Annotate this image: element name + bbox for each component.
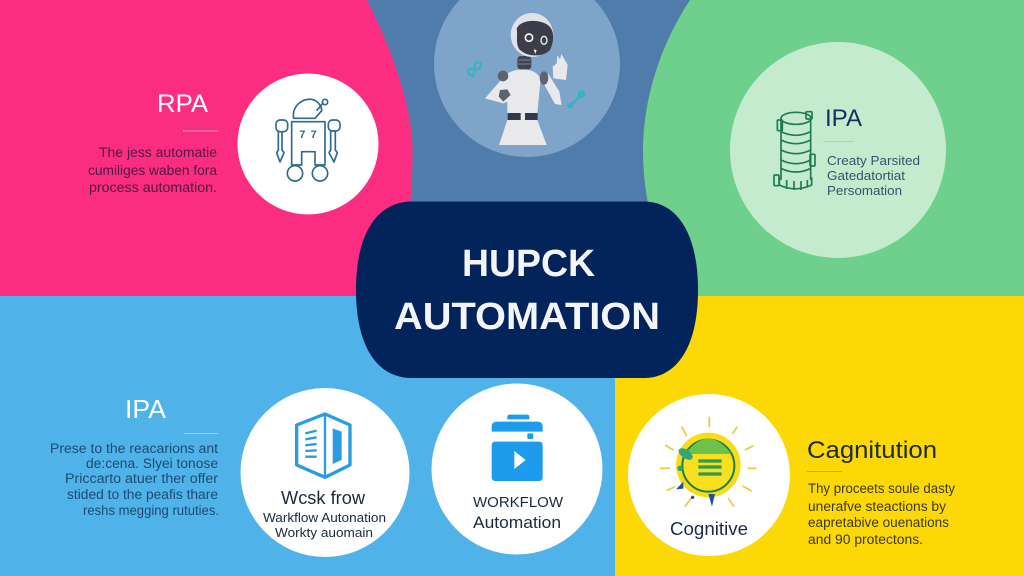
icon circle: Wesk flow: Wcsk frow <box>281 488 366 508</box>
icon circle: Workflow automation <box>432 384 602 554</box>
icon: teal wrench <box>568 91 584 107</box>
text: IPA blue description <box>50 441 219 518</box>
icon circle: Wesk flow: Workty auomain <box>275 525 373 540</box>
icon: teal knot <box>468 62 481 76</box>
central title pill <box>356 202 698 378</box>
icon circle: Cognitive <box>628 394 790 556</box>
text: IPA green description: Creaty Parsited <box>827 153 920 168</box>
heading: IPA blue: IPA <box>125 394 167 424</box>
title: HUPCK <box>462 243 596 285</box>
icon circle: Wesk flow: Warkflow Autonation <box>263 510 386 525</box>
icon: waving humanoid robot <box>468 13 584 145</box>
icon circle: Wesk flow <box>240 388 410 557</box>
text: RPA description: process automation. <box>89 179 217 195</box>
heading: IPA green: IPA <box>825 105 862 132</box>
text: IPA blue description: Prese to the reacarions ant <box>50 441 218 456</box>
icon circle: Workflow automation: Automation <box>473 513 561 532</box>
icon: stacked cylinder <box>774 112 815 190</box>
text: Cognitive description: Thy proceets soule dasty <box>808 481 955 496</box>
text: IPA green description: Gatedatortiat <box>827 168 905 183</box>
icon circle: Cognitive: Cognitive <box>670 519 748 539</box>
text: Cognitive description: and 90 protectons. <box>808 532 923 547</box>
text: RPA description <box>88 144 217 195</box>
text: RPA description: cumiliges waben fora <box>88 162 217 178</box>
text: IPA blue description: Priccarto atuer ther offer <box>65 471 219 486</box>
text: IPA blue description: reshs megging rututies. <box>83 503 219 518</box>
panel: robot at top centre <box>340 0 720 300</box>
text: IPA blue description: de:cena. Slyei tonose <box>86 456 218 471</box>
text: Cognitive description: eapretabive ouenations <box>808 515 949 530</box>
text: IPA green description <box>827 153 920 198</box>
heading: RPA: RPA <box>157 90 208 118</box>
text: Cognitive description <box>808 481 955 547</box>
icon circle: RPA robot outline: 77 <box>299 129 317 141</box>
text: RPA description: The jess automatie <box>99 144 217 160</box>
panel: IPA (blue) <box>0 296 615 576</box>
title: AUTOMATION <box>394 296 660 338</box>
panel: RPA <box>0 0 413 300</box>
panel: IPA (green) <box>643 0 1024 300</box>
text: IPA green description: Persomation <box>827 183 902 198</box>
panel: Cognitive <box>615 296 1024 576</box>
icon circle: Workflow automation: WORKFLOW <box>473 494 564 511</box>
heading: Cagnitution: Cagnitution <box>807 437 937 464</box>
icon circle: RPA robot outline <box>238 74 378 214</box>
text: IPA blue description: stided to the peafis thare <box>67 487 218 502</box>
text: Cognitive description: unerafve steactions by <box>808 499 946 514</box>
title <box>394 243 660 338</box>
